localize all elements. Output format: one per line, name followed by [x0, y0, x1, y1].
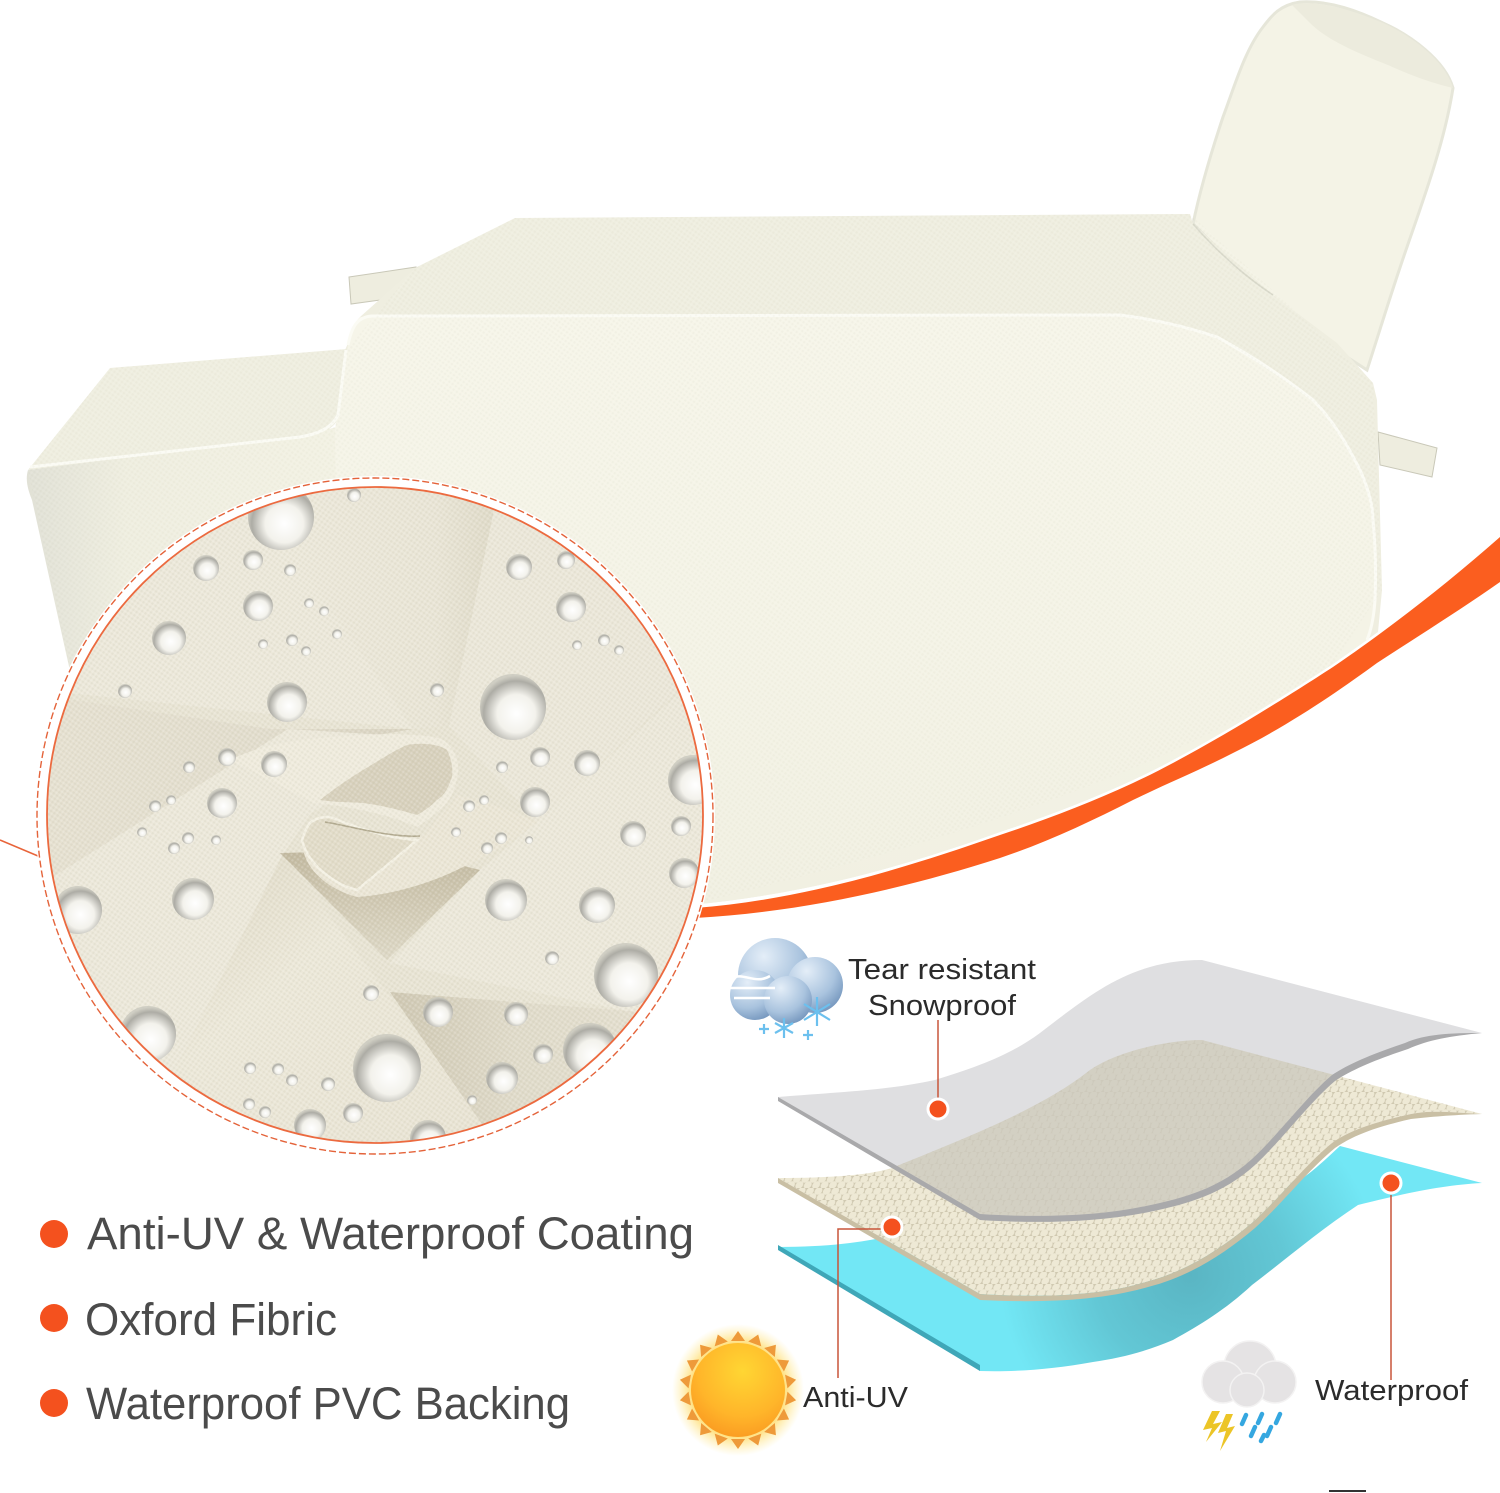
grey tear resistant layer: [778, 960, 1482, 1222]
bullet list: [40, 1208, 694, 1429]
right tab: [1378, 432, 1437, 477]
circle dashed orange ring: [37, 478, 713, 1154]
water droplets: [54, 484, 718, 1156]
top-center fold: [481, 506, 494, 570]
label: waterproof: Waterproof: [1315, 1375, 1469, 1407]
left block front: [27, 425, 360, 700]
bullet text 3: Waterproof PVC Backing: [86, 1378, 570, 1429]
bottom-right fold: [390, 992, 634, 1124]
label: snowproof: Snowproof: [868, 990, 1017, 1022]
main front panel: [335, 315, 1376, 905]
blue layer thickness: [778, 1245, 980, 1371]
left seam piping: [30, 350, 346, 467]
bullet text 2: Oxford Fibric: [85, 1294, 337, 1345]
orange swoosh: [695, 537, 1500, 918]
left lower fold: [54, 729, 374, 890]
bottom-center fold: [150, 854, 500, 1150]
material layers diagram: [778, 960, 1482, 1371]
spiral outer lip: [230, 734, 458, 827]
circle solid orange ring: [47, 487, 703, 1143]
callout leader: anti-uv: [838, 1229, 888, 1378]
icon: rain cloud: [1202, 1341, 1296, 1451]
spiral inner shell: [302, 817, 417, 890]
beige layer seen through grey: [897, 1040, 1332, 1216]
callout dot: beige layer: [882, 1217, 902, 1237]
bottom edge mark: [1329, 1490, 1366, 1492]
spiral cavity: [320, 744, 452, 815]
small orange line at left: [0, 840, 38, 856]
bullet dot 1: [40, 1220, 68, 1248]
beige oxford fibric layer: [778, 1040, 1482, 1301]
chimney sleeve: [1193, 2, 1453, 370]
product: grill cover: [27, 2, 1453, 905]
left block top: [28, 349, 347, 470]
right lower fold: [390, 660, 720, 1012]
bullet text 1: Anti-UV & Waterproof Coating: [87, 1208, 694, 1259]
body silhouette and back top panel: [340, 214, 1382, 905]
left tab: [349, 267, 416, 304]
spiral inner crease: [325, 822, 420, 836]
grey layer thickness: [778, 1033, 1482, 1222]
bullet dot 2: [40, 1304, 68, 1332]
beige layer thickness: [778, 1112, 1482, 1301]
callout dot: blue layer: [1381, 1173, 1401, 1193]
top-left fold: [40, 470, 413, 729]
spiral right sweep fold: [304, 852, 465, 897]
weave overlay: [282, 509, 538, 1123]
label: anti-uv: Anti-UV: [803, 1382, 909, 1414]
callout dot: grey layer: [928, 1099, 948, 1119]
center shadow: [280, 850, 480, 960]
callout leader: snowproof: [937, 1020, 939, 1100]
callout leader: waterproof: [1390, 1195, 1392, 1380]
label: tear resistant: Tear resistant: [848, 954, 1036, 986]
left middle fold: [278, 729, 412, 734]
blue waterproof layer: [778, 1146, 1482, 1371]
top-right fold: [449, 470, 720, 822]
icon: sun: [672, 1324, 804, 1456]
chimney base seam: [1193, 224, 1273, 295]
chimney cap: [1292, 3, 1453, 88]
front seam piping: [348, 315, 1376, 640]
icon: snow cloud: [730, 938, 843, 1040]
white disc behind fabric closeup: [35, 476, 715, 1156]
fabric weave: [28, 214, 1382, 905]
bullet dot 3: [40, 1389, 68, 1417]
fabric closeup circle: [40, 470, 720, 1156]
